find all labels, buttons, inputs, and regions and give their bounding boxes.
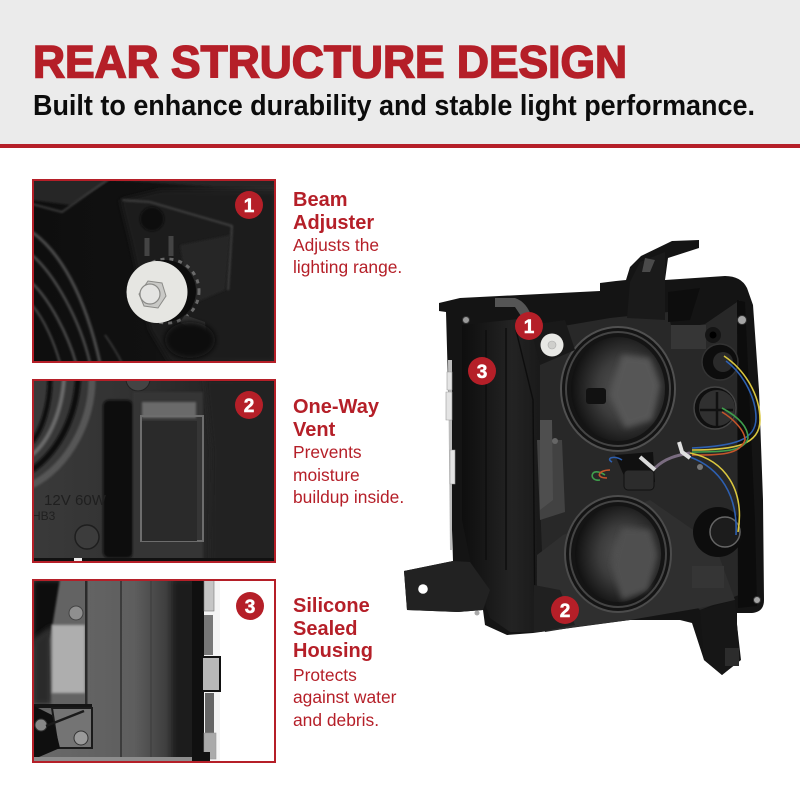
badge 1 — [235, 191, 263, 219]
badge 2 — [235, 391, 263, 419]
badge 3 on headlight: 3 — [477, 362, 487, 383]
beam adjuster knob — [530, 320, 575, 365]
mounting tab — [404, 561, 490, 612]
panel: one-way vent photo — [32, 367, 276, 563]
dark flange and grey strut — [495, 298, 532, 322]
badge 1: 1 — [244, 196, 255, 217]
badge 3 — [236, 592, 264, 620]
badge 1 on headlight — [515, 312, 543, 340]
badge 2 on headlight — [551, 596, 579, 624]
panel: one-way vent photo: 12V 60W — [44, 492, 107, 509]
badge 3: 3 — [245, 597, 255, 618]
text block: silicone sealed housing: Housing — [293, 640, 373, 662]
bulb sockets — [702, 344, 738, 380]
badge 2: 2 — [244, 396, 254, 417]
wires — [592, 356, 760, 535]
screws — [462, 316, 470, 324]
white clip strip left edge — [448, 360, 452, 550]
text block: beam adjuster: Beam — [293, 189, 347, 211]
connector — [615, 452, 655, 490]
bracket shading — [627, 252, 665, 320]
title: REAR STRUCTURE DESIGN — [33, 36, 627, 88]
badge 2 on headlight: 2 — [560, 601, 570, 622]
wire clips — [679, 442, 690, 458]
text block: silicone sealed housing: Silicone — [293, 595, 370, 617]
text block: beam adjuster — [293, 189, 402, 277]
header band — [0, 0, 800, 148]
text block: beam adjuster: Adjusts the — [293, 235, 379, 255]
panel: beam adjuster photo — [32, 178, 276, 363]
left housing face — [462, 318, 545, 632]
badge 3 on headlight — [468, 357, 496, 385]
text block: one-way vent: One-Way — [293, 396, 380, 418]
headlight rear view — [404, 240, 764, 675]
text block: silicone sealed housing: against water — [293, 687, 397, 707]
right frame — [737, 300, 757, 608]
text block: beam adjuster: Adjuster — [293, 212, 374, 234]
text block: one-way vent: buildup inside. — [293, 487, 404, 507]
text block: one-way vent: moisture — [293, 465, 360, 485]
text block: silicone sealed housing: Sealed — [293, 618, 357, 640]
lower lens — [565, 496, 671, 612]
lower plate — [534, 585, 575, 632]
panel: silicone sealed housing photo — [32, 579, 276, 763]
text block: one-way vent: Prevents — [293, 442, 362, 462]
lower clip — [700, 600, 740, 675]
text block: silicone sealed housing: and debris. — [293, 710, 379, 730]
text block: one-way vent — [293, 396, 404, 507]
housing silhouette — [404, 240, 764, 675]
upper lens — [561, 327, 675, 451]
central housing — [540, 300, 752, 632]
badge 1 on headlight: 1 — [524, 317, 535, 338]
subtitle: Built to enhance durability and stable light performance. — [33, 90, 755, 122]
text block: one-way vent: Vent — [293, 419, 336, 441]
text block: silicone sealed housing — [293, 595, 397, 730]
text block: silicone sealed housing: Protects — [293, 665, 357, 685]
panel: one-way vent photo: HB3 — [32, 509, 56, 523]
text block: beam adjuster: lighting range. — [293, 257, 402, 277]
